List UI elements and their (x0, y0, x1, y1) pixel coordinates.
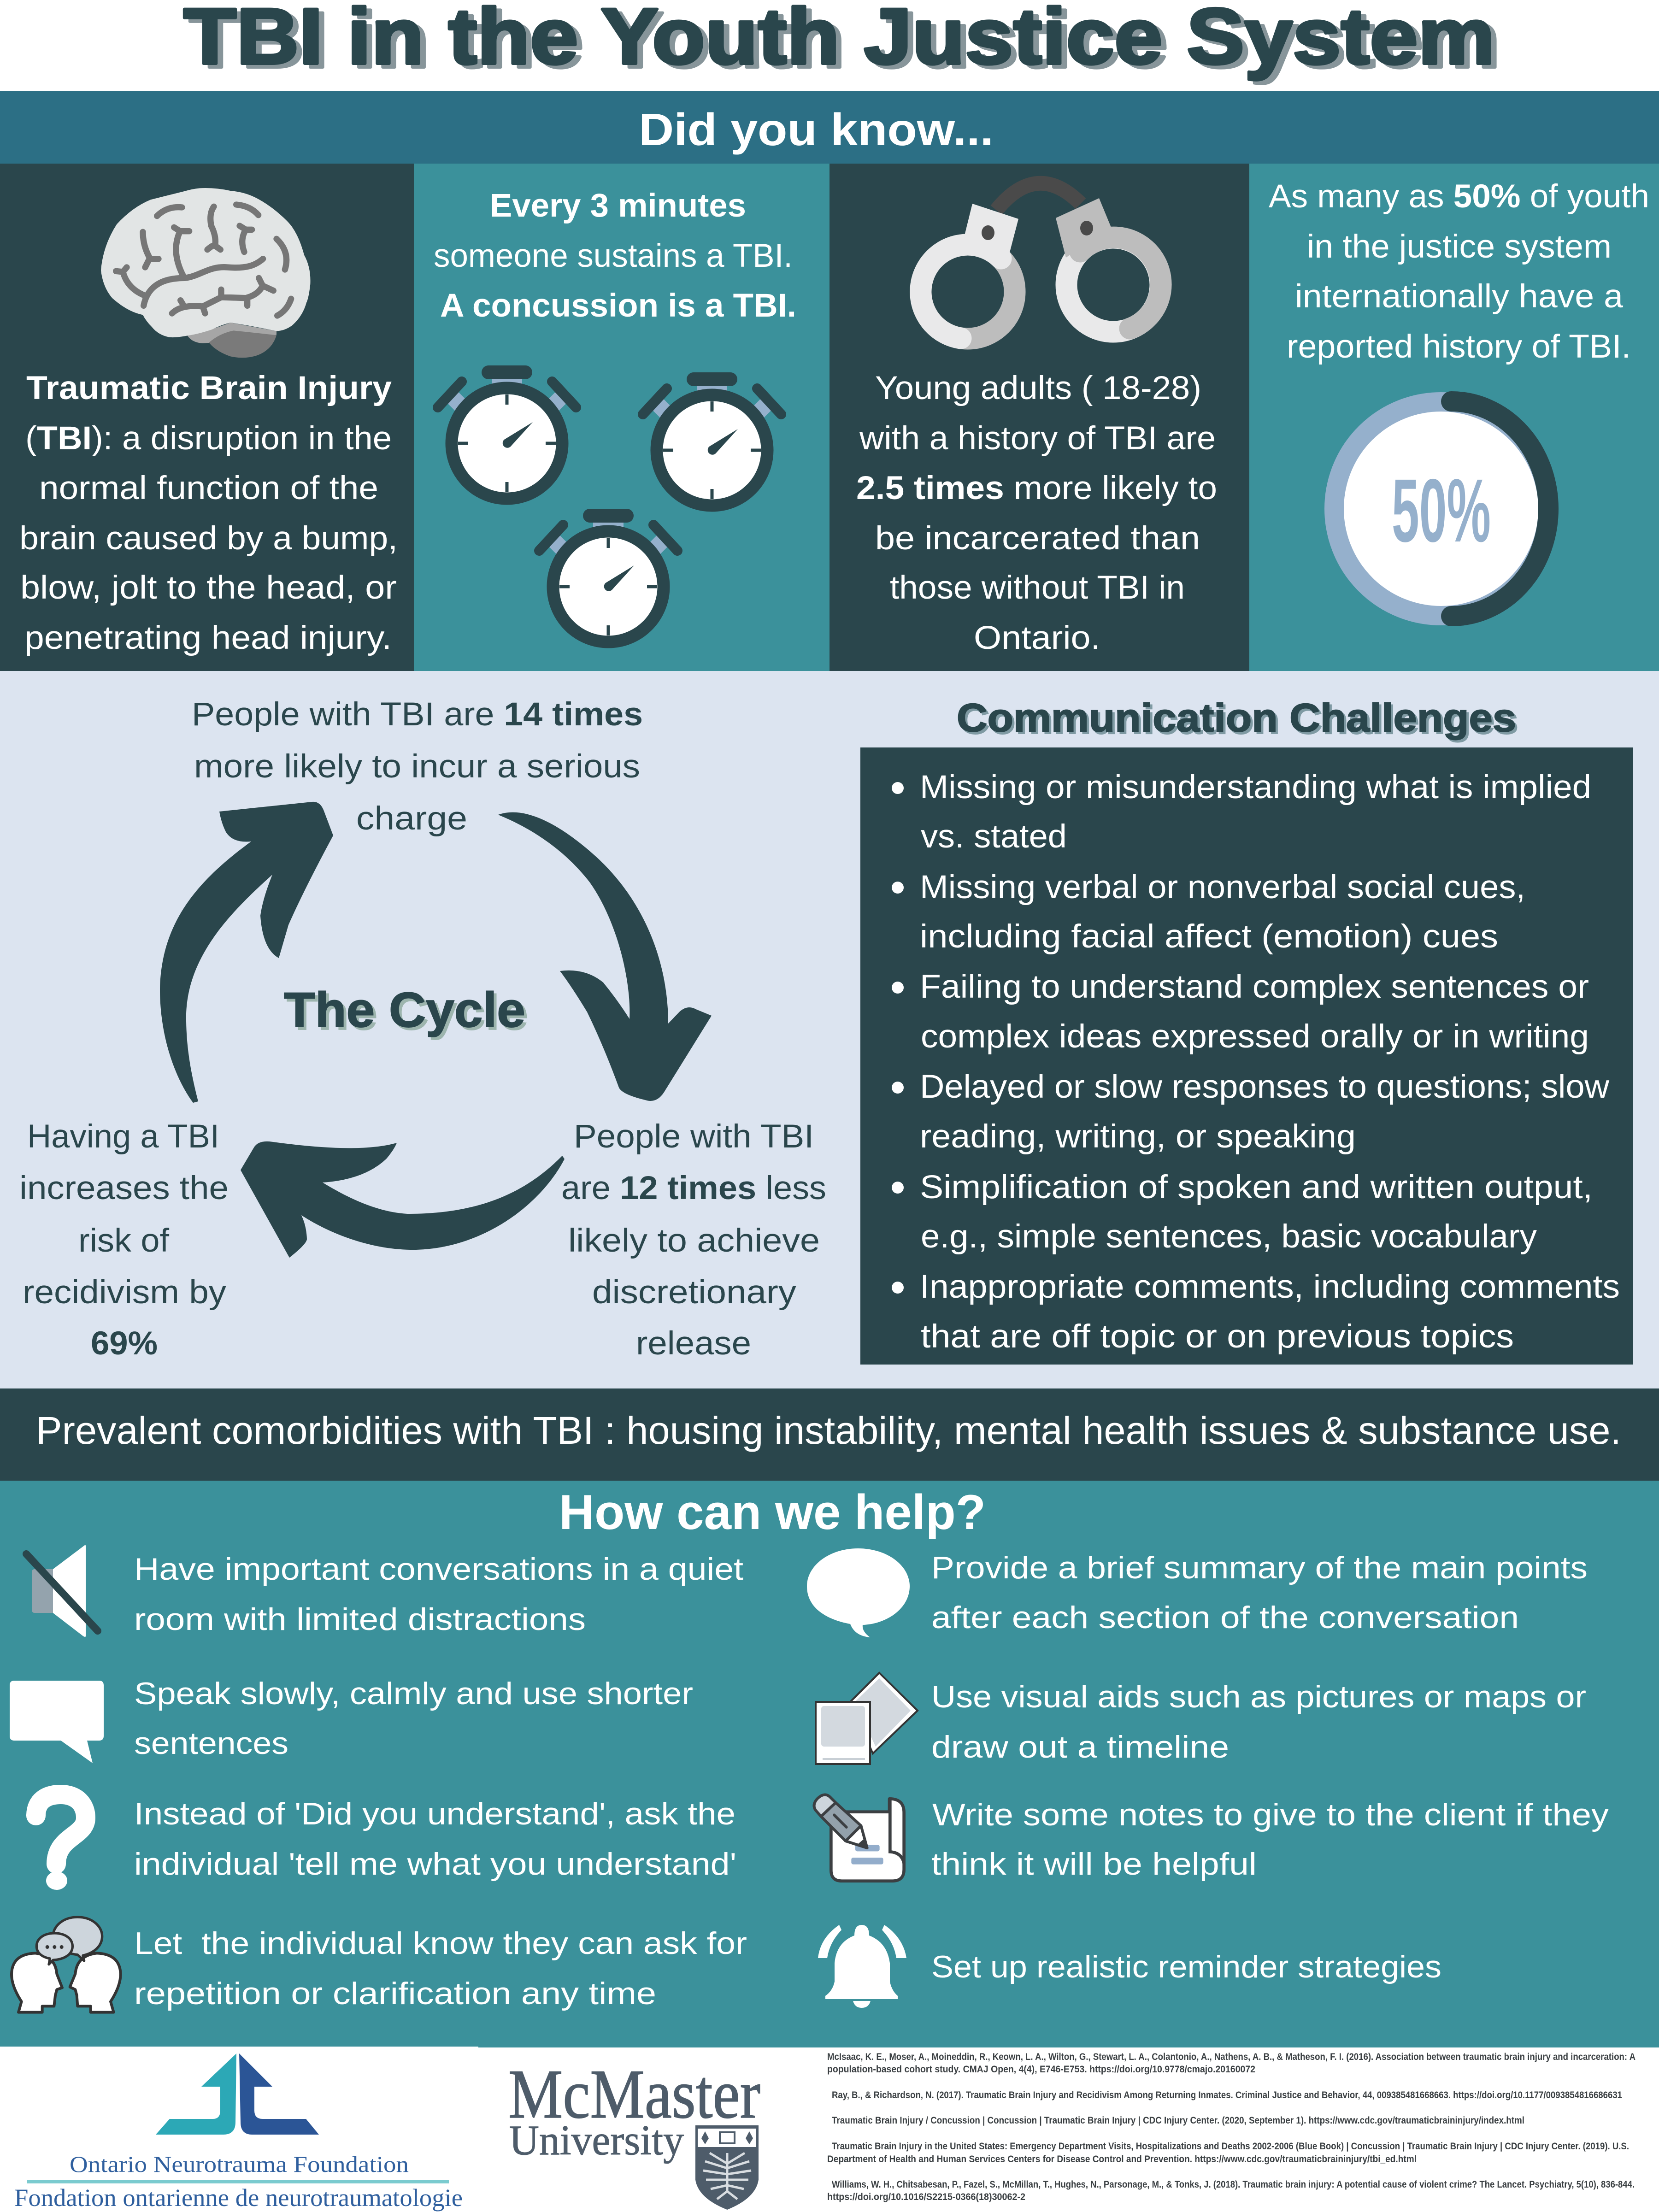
arrow: top to right (498, 812, 712, 1101)
tip: brief summary: Provide a brief summary of the main points (931, 1550, 1588, 1585)
list text: Missing verbal or nonverbal social cues, (920, 869, 1525, 906)
statistic text: A concussion is a TBI. (440, 288, 796, 324)
incarceration text: Young adults ( 18-28) (875, 370, 1201, 406)
banner: prevalent comorbidities (0, 1388, 1659, 1481)
list text: that are off topic or on previous topics (921, 1318, 1514, 1355)
panel: how can we help (0, 1481, 1659, 2047)
statistic text (434, 188, 796, 324)
logo: Ontario Neurotrauma Foundation (14, 2053, 463, 2212)
list text: Missing or misunderstanding what is implied (920, 769, 1591, 806)
definition text: penetrating head injury. (24, 620, 392, 656)
definition text: Traumatic Brain Injury (26, 370, 392, 406)
cycle text: serious charge (192, 696, 643, 837)
cycle text: discretionary release (561, 1118, 826, 1362)
tip: tell me what you understand: Instead of 'Did you understand', ask the (134, 1796, 735, 1831)
icon: stopwatch 2 (643, 372, 781, 506)
icon: bell (818, 1925, 906, 2008)
cycle heading: The Cycle (284, 982, 525, 1037)
cycle text: serious charge: People with TBI are 14 times (192, 696, 643, 733)
tip: quiet room: room with limited distractions (134, 1602, 586, 1637)
statistic text: internationally have a (1295, 278, 1624, 315)
icon: stopwatch 1 (438, 365, 576, 499)
tip: ask for repetition (134, 1926, 747, 2011)
tip: visual aids (931, 1679, 1586, 1765)
panel: every 3 minutes (414, 164, 830, 671)
statistic text: As many as 50% of youth (1269, 178, 1649, 215)
tip: write notes: think it will be helpful (931, 1847, 1257, 1882)
panel: 50 percent of youth (1249, 164, 1659, 671)
references: https://doi.org/10.1016/S2215-0366(18)30062-2 (827, 2192, 1025, 2202)
definition text: brain caused by a bump, (19, 520, 398, 557)
icon: McMaster shield (695, 2125, 759, 2210)
icon: question mark (36, 1794, 86, 1890)
cycle text: recidivism (19, 1118, 229, 1362)
banner: did you know (0, 91, 1659, 164)
logo: Ontario Neurotrauma Foundation: Fondation ontarienne de neurotraumatologie (14, 2184, 463, 2212)
panel: traumatic brain injury definition (0, 164, 414, 671)
tip: tell me what you understand: individual 'tell me what you understand' (134, 1847, 736, 1882)
donut chart: 50% (1334, 401, 1548, 616)
statistic text (1269, 178, 1649, 365)
cycle text: recidivism: increases the (19, 1170, 229, 1206)
cycle text: serious charge: more likely to incur a serious (194, 748, 640, 785)
icon: pictures (816, 1673, 918, 1764)
icon: pencil and notes (814, 1795, 904, 1881)
tip: visual aids: Use visual aids such as pictures or maps or (931, 1679, 1586, 1714)
donut chart: 50%: 50% (1392, 460, 1491, 561)
definition text: (TBI): a disruption in the (25, 420, 392, 457)
cycle text: recidivism: 69% (91, 1325, 158, 1362)
incarceration text: those without TBI in (890, 570, 1185, 606)
icon: two heads talking (12, 1917, 121, 2012)
panel: young adults incarceration (830, 164, 1249, 671)
icon: brain (101, 188, 310, 358)
list text: complex ideas expressed orally or in writing (921, 1018, 1589, 1055)
list text: reading, writing, or speaking (920, 1118, 1356, 1155)
statistic text: Every 3 minutes (490, 188, 746, 224)
tip: reminder strategies: Set up realistic reminder strategies (931, 1949, 1441, 1984)
incarceration text: be incarcerated than (875, 520, 1200, 557)
heading: how can we help: How can we help? (559, 1484, 986, 1540)
icon: muted speaker (26, 1545, 98, 1637)
arrow: left to top (160, 802, 333, 1103)
logo: McMaster University (508, 2055, 760, 2210)
tip: quiet room: Have important conversations in a quiet (134, 1552, 743, 1587)
incarceration text: Ontario. (974, 620, 1100, 656)
tip: brief summary (931, 1550, 1588, 1635)
logo: Ontario Neurotrauma Foundation: Ontario Neurotrauma Foundation (70, 2151, 409, 2177)
incarceration text: with a history of TBI are (859, 420, 1216, 457)
tip: write notes: Write some notes to give to the client if they (932, 1797, 1609, 1832)
cycle text: discretionary release: discretionary (592, 1274, 797, 1311)
tip: visual aids: draw out a timeline (931, 1730, 1229, 1765)
list text: including facial affect (emotion) cues (920, 918, 1498, 955)
cycle text: recidivism: recidivism by (23, 1274, 227, 1311)
cycle diagram (19, 696, 826, 1362)
cycle text: discretionary release: are 12 times less (561, 1170, 826, 1206)
banner: did you know: Did you know... (639, 104, 994, 155)
incarceration text: 2.5 times more likely to (856, 470, 1217, 506)
list text: Delayed or slow responses to questions; slow (920, 1069, 1610, 1105)
references (827, 2052, 1635, 2202)
tip: speak slowly (134, 1676, 693, 1761)
icon: round speech bubble (807, 1548, 910, 1637)
cycle text: serious charge: charge (356, 800, 467, 837)
list text: Simplification of spoken and written output, (920, 1169, 1593, 1206)
tip: quiet room (134, 1552, 743, 1637)
cycle text: discretionary release: release (636, 1325, 751, 1362)
icon: stopwatch 3 (539, 509, 677, 642)
definition text (19, 370, 398, 656)
statistic text: reported history of TBI. (1287, 329, 1631, 365)
tip: brief summary: after each section of the conversation (931, 1600, 1519, 1635)
list text: e.g., simple sentences, basic vocabulary (921, 1218, 1537, 1255)
tip: tell me what you understand (134, 1796, 736, 1882)
definition text: normal function of the (39, 470, 378, 506)
cycle text: discretionary release: People with TBI (574, 1118, 814, 1155)
list text: Inappropriate comments, including comments (920, 1269, 1620, 1305)
tip: write notes (931, 1797, 1609, 1882)
references: Traumatic Brain Injury / Concussion | Concussion | Traumatic Brain Injury | CDC Injury Center. (2020, September 1). https://www.cdc.gov/traumaticbraininjury/index.html (832, 2115, 1524, 2126)
tip: ask for repetition: Let the individual know they can ask for (134, 1926, 747, 1961)
tip: ask for repetition: repetition or clarification any time (134, 1976, 656, 2011)
icon: square speech bubble (10, 1681, 104, 1763)
cycle text: recidivism: Having a TBI (27, 1118, 219, 1155)
statistic text: in the justice system (1307, 229, 1612, 265)
references: Department of Health and Human Services Centers for Disease Control and Prevention. https://www.cdc.gov/traumaticbraininjury/tbi_ed.html (827, 2154, 1417, 2165)
arrow: right to left (241, 1141, 565, 1258)
bullets (892, 782, 904, 1294)
banner: prevalent comorbidities: Prevalent comorbidities with TBI : housing instability, mental health issues & substance use. (36, 1409, 1621, 1452)
tip: speak slowly: sentences (134, 1726, 288, 1761)
references: population-based cohort study. CMAJ Open, 4(4), E746-E753. https://doi.org/10.9778/cmajo.20160072 (827, 2064, 1255, 2075)
panel: the cycle background and communication section (0, 671, 1659, 1388)
list text (920, 769, 1620, 1355)
heading: communication challenges: Communication Challenges (957, 696, 1516, 740)
tip: speak slowly: Speak slowly, calmly and use shorter (134, 1676, 693, 1711)
list text: vs. stated (921, 818, 1067, 855)
icon: handcuffs (921, 183, 1161, 339)
cycle text: discretionary release: likely to achieve (568, 1223, 820, 1259)
statistic text: someone sustains a TBI. (434, 238, 793, 274)
logo: McMaster University: McMaster (508, 2055, 760, 2133)
definition text: blow, jolt to the head, or (20, 570, 397, 606)
panel: communication challenges list (860, 747, 1633, 1365)
cycle text: recidivism: risk of (78, 1223, 169, 1259)
logo: McMaster University: University (509, 2117, 684, 2164)
incarceration text (856, 370, 1217, 656)
list text: Failing to understand complex sentences or (920, 969, 1589, 1005)
